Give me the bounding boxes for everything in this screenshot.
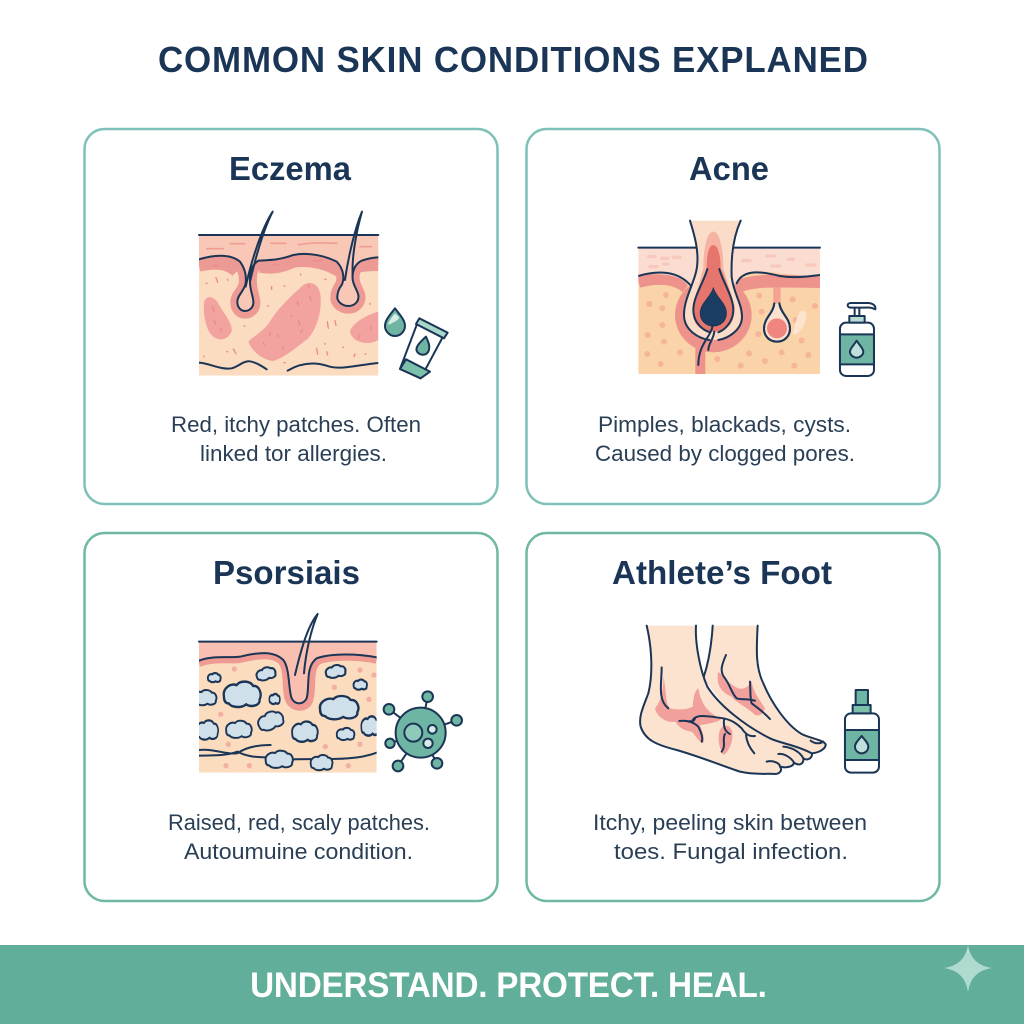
description: athlete's foot: Itchy, peeling skin between <box>593 810 867 835</box>
heading: acne: Acne <box>689 150 769 187</box>
description: acne: Pimples, blackads, cysts. <box>598 412 851 437</box>
panel: athlete's foot <box>526 533 940 901</box>
heading: athlete's foot: Athlete’s Foot <box>612 554 832 591</box>
panel: acne <box>526 129 940 504</box>
footer banner <box>0 945 1024 1024</box>
heading: eczema: Eczema <box>229 150 352 187</box>
description: acne: Caused by clogged pores. <box>595 441 855 466</box>
illustration: psoriasis skin plaques <box>193 614 462 773</box>
banner slogan: UNDERSTAND. PROTECT. HEAL. <box>250 966 767 1005</box>
panel: psoriasis <box>84 533 498 901</box>
heading: psoriasis: Psorsiais <box>213 554 360 591</box>
description: psoriasis: Autoumuine condition. <box>184 839 413 864</box>
illustration: acne clogged pore <box>638 221 875 376</box>
description: eczema: linked tor allergies. <box>200 441 387 466</box>
description: eczema: Red, itchy patches. Often <box>171 412 421 437</box>
illustration: feet with fungal cracks <box>640 626 879 774</box>
illustration: eczema skin cross-section <box>199 212 448 378</box>
panel: eczema <box>84 129 498 504</box>
icon: sparkle <box>944 945 992 992</box>
description: psoriasis: Raised, red, scaly patches. <box>168 810 430 835</box>
description: athlete's foot: toes. Fungal infection. <box>614 839 848 864</box>
title: COMMON SKIN CONDITIONS EXPLANED <box>158 40 868 80</box>
